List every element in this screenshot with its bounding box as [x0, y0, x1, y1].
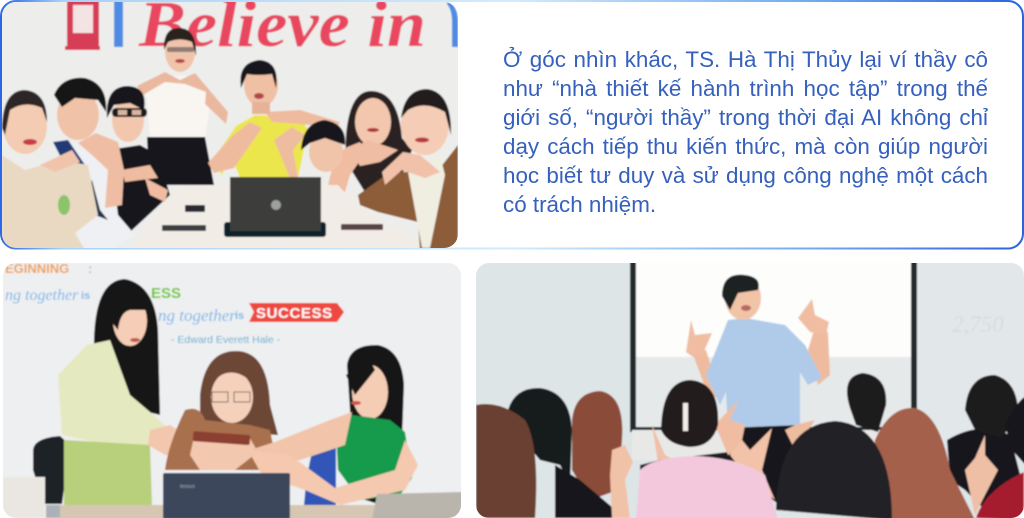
pink shirt [636, 456, 778, 518]
table [168, 184, 346, 202]
desk surface [60, 505, 380, 518]
wall quote lettering: ng together [5, 287, 79, 304]
wall quote lettering: : [88, 261, 92, 276]
student in white and navy shirt [52, 76, 132, 234]
phones on table [162, 205, 383, 231]
wall quote lettering: is [81, 290, 90, 302]
wall quote lettering: - Edward Everett Hale - [171, 334, 281, 346]
quote text: Ở góc nhìn khác, TS. Hà Thị Thủy lại ví thầy cô [503, 47, 988, 72]
Lenovo laptop: lenovo [180, 484, 195, 490]
Lenovo laptop [163, 473, 290, 518]
photo: lecturer teaching a class [470, 260, 1024, 518]
girl in green top [248, 345, 418, 505]
quote text [503, 46, 988, 217]
quote text: có trách nhiệm. [503, 192, 656, 217]
quote text: giới số, “người thầy” trong thời đại AI không chỉ [503, 105, 988, 130]
quote text: học biết tư duy và sử dụng công nghệ một cách [503, 163, 988, 188]
student in yellow shirt [208, 60, 340, 178]
quote text: như “nhà thiết kế hành trình học tập” trong thế [503, 76, 988, 101]
photo: students making heart gestures [0, 0, 460, 250]
quote text: dạy cách tiếp thu kiến thức, mà còn giúp người [503, 134, 988, 159]
head: student with hair clip [661, 380, 718, 447]
student with long hair [327, 91, 412, 202]
student heads and shoulders [476, 373, 1024, 518]
laptop [224, 177, 326, 237]
wall quote lettering: SUCCESS [256, 305, 333, 322]
wall decoration: blue bars [114, 0, 458, 47]
teacher in white blouse [137, 28, 228, 185]
wall quote lettering: EGINNING [5, 261, 69, 276]
student in brown jacket [358, 89, 458, 250]
blue chair [304, 448, 336, 505]
right whiteboard and projector screen [629, 263, 918, 460]
panel: top card frame [1, 1, 1023, 248]
wall quote lettering: ng together [158, 306, 236, 325]
wall quote lettering [5, 261, 344, 346]
seated girl with glasses [165, 351, 278, 470]
student in beige jacket [2, 90, 98, 250]
photo: lecturer and students with tablet [0, 260, 465, 518]
wall quote lettering: ESS [151, 285, 181, 302]
boy leaning into frame [274, 119, 347, 178]
laptops behind [3, 476, 61, 518]
student in black T-shirt [107, 86, 170, 232]
woman in pale green [58, 278, 178, 506]
wall decoration: phone booth [65, 0, 100, 50]
lecturer [686, 275, 830, 505]
silver laptop right [372, 492, 462, 518]
right whiteboard and projector screen: 2,750 [952, 312, 1004, 337]
black backpack [33, 436, 70, 504]
wall quote lettering: is [235, 310, 244, 322]
